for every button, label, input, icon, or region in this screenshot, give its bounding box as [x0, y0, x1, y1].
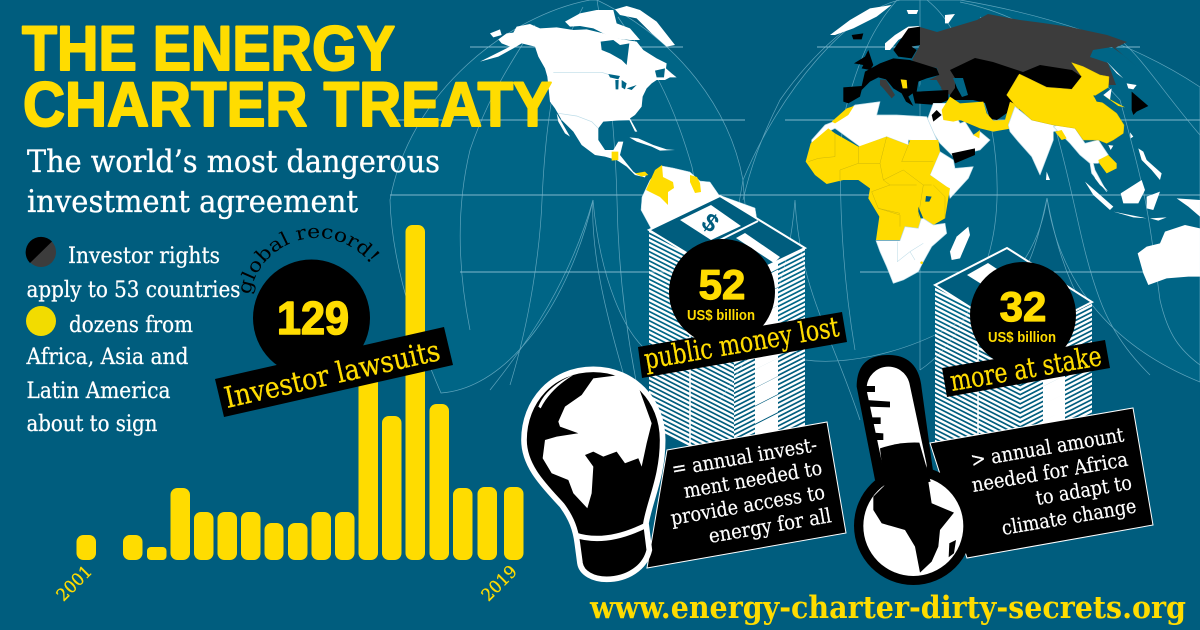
callout: 129 investor lawsuits: 129: [277, 292, 349, 344]
map projection grid: [390, 0, 1200, 430]
russia: [912, 14, 1137, 95]
africa: [812, 102, 938, 147]
text box: annual investment: provide access to: [669, 480, 827, 530]
legend: about to sign: [26, 412, 158, 437]
title: [22, 14, 552, 140]
arabia and iran: [927, 97, 1020, 157]
yemen: [952, 148, 975, 163]
south america: [641, 166, 757, 232]
icon: thermometer with africa: [854, 355, 973, 585]
callout: 32 US$ billion more at stake: [942, 262, 1110, 398]
icon: light bulb with globe: [524, 369, 663, 579]
world map: [480, 5, 1200, 285]
bar chart: investor lawsuits per year: [76, 225, 524, 560]
text box: annual investment: energy for all: [707, 503, 833, 548]
icon: yellow circle: [26, 306, 56, 336]
text box: annual amount for Africa: to adapt to: [1034, 470, 1133, 510]
title: CHARTER TREATY: [23, 70, 552, 140]
legend: Investor rights: [68, 244, 220, 269]
callout: 52 US$ billion public money lost: US$ billion: [687, 307, 755, 324]
stack top: [649, 196, 805, 282]
subtitle: [27, 144, 440, 220]
text box: annual amount for Africa: needed for Africa: [970, 447, 1130, 497]
callout: 32 US$ billion more at stake: 32: [1000, 283, 1046, 330]
china: [1007, 63, 1124, 143]
legend: apply to 53 countries: [26, 278, 240, 303]
text box: annual investment: [647, 422, 846, 568]
text box: annual amount for Africa: [930, 408, 1153, 558]
subtitle: investment agreement: [27, 184, 359, 220]
guatemala: [612, 152, 618, 161]
text box: annual investment: = annual invest-: [670, 432, 819, 481]
year label 2019: 2019: [478, 562, 522, 606]
callout: 52 US$ billion public money lost: public money lost: [642, 310, 842, 376]
callout: 32 US$ billion more at stake: more at stake: [948, 339, 1104, 398]
icon: member countries half black half grey circle: [26, 237, 56, 267]
legend: Africa, Asia and: [26, 345, 188, 370]
legend: [26, 237, 240, 437]
year label 2001: 2001: [53, 562, 97, 606]
callout: 52 US$ billion public money lost: [638, 239, 847, 378]
japan: [1132, 92, 1148, 115]
colombia and guyana: [646, 165, 701, 205]
legend: Latin America: [26, 379, 170, 404]
caspian sea: [953, 78, 968, 97]
text box: annual investment: ment needed to: [682, 455, 824, 503]
central asia treaty members: [950, 58, 1082, 120]
callout: 52 US$ billion public money lost: 52: [699, 261, 745, 308]
money stack 32: [935, 248, 1092, 490]
title: THE ENERGY: [22, 14, 395, 84]
southeast asia and australia: [1085, 173, 1200, 285]
legend: dozens from: [69, 313, 193, 338]
subtitle: The world’s most dangerous: [27, 144, 440, 180]
text box: annual amount for Africa: climate change: [1000, 494, 1138, 540]
asia: [1007, 62, 1162, 192]
money stack 52: [649, 196, 805, 470]
europe and middle east: [830, 5, 955, 106]
callout: 129 investor lawsuits: Investor lawsuits: [221, 333, 443, 415]
callout: 129 investor lawsuits: [215, 228, 453, 417]
north america: [480, 6, 677, 177]
global record arc text: global record!: [240, 228, 380, 294]
dollar sign: $: [696, 208, 724, 239]
panama: [635, 172, 648, 177]
text box: annual amount for Africa: > annual amount: [969, 422, 1126, 472]
callout: 32 US$ billion more at stake: US$ billion: [988, 329, 1056, 346]
stack side hatching: [649, 230, 734, 470]
